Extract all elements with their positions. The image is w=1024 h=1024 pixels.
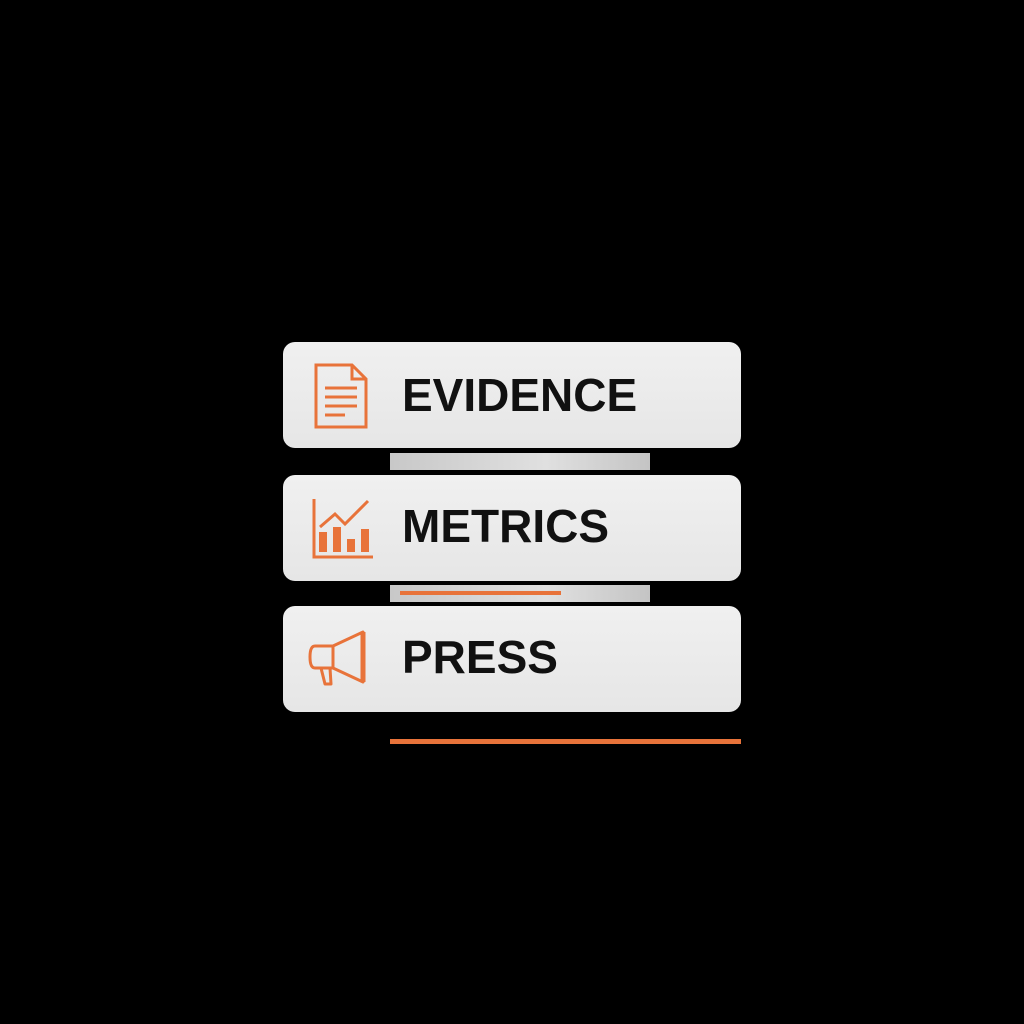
label: METRICS: METRICS [402, 500, 609, 552]
bottom accent line [390, 739, 741, 744]
icon: document [314, 364, 368, 428]
label: PRESS: PRESS [402, 631, 558, 683]
connector 2 with progress [390, 585, 650, 602]
card: metrics [283, 475, 741, 581]
connector 1 [390, 453, 650, 470]
card: press [283, 606, 741, 712]
card: evidence [283, 342, 741, 448]
label: EVIDENCE: EVIDENCE [402, 369, 637, 421]
icon: chart [312, 499, 373, 558]
icon: megaphone [308, 630, 366, 686]
